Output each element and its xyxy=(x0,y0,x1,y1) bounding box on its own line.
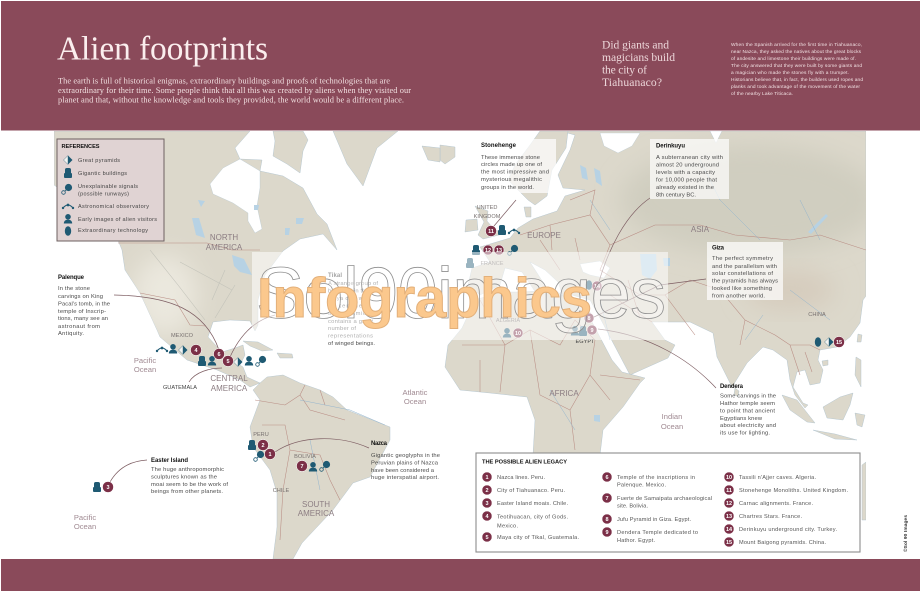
legend: the possible alien legacy: 2 xyxy=(485,488,489,494)
marker 14 xyxy=(592,281,602,291)
callout: Nazca: Peruvian plains of Nazca xyxy=(371,460,439,466)
legend: the possible alien legacy: Chartres Stars. France. xyxy=(739,514,802,520)
callout: Tikal: Maya city, with xyxy=(328,296,370,302)
legend: the possible alien legacy: 1 xyxy=(485,475,489,481)
callout: Easter Island: sculptures known as the xyxy=(151,474,217,480)
legend: the possible alien legacy: 14 xyxy=(726,527,733,533)
map labels: Pacific xyxy=(134,356,156,365)
legend: the possible alien legacy: Mexico. xyxy=(497,524,518,530)
legend: the possible alien legacy: Maya city of Tikal, Guatemala. xyxy=(497,535,579,541)
legend: the possible alien legacy: 15 xyxy=(726,540,732,546)
map labels: Indian xyxy=(662,412,682,421)
map labels: SOUTH xyxy=(302,500,330,509)
marker 10 xyxy=(513,328,523,338)
references box: (possible runways) xyxy=(78,192,129,198)
legend: the possible alien legacy: 8 xyxy=(605,517,609,523)
references box: Gigantic buildings xyxy=(78,171,127,177)
map labels: CHINA xyxy=(808,312,826,318)
marker 11: 11 xyxy=(488,229,494,235)
sidebar text: a magician who made the stones fly with a trumpet. xyxy=(731,70,849,76)
map labels: UNITED xyxy=(477,205,497,211)
references box: REFERENCES xyxy=(62,144,100,150)
callout: Derinkuyu: A subterranean city with xyxy=(656,155,723,161)
map labels xyxy=(74,205,826,531)
sidebar text: The city answered that they were built by some giants and xyxy=(731,63,862,69)
callout: Easter Island: beings from other planets. xyxy=(151,489,223,495)
sidebar text: planks and took advantage of the movement of the water xyxy=(731,84,860,90)
title: Alien footprints xyxy=(57,30,268,68)
map labels: AFRICA xyxy=(549,389,579,398)
world map xyxy=(54,131,880,559)
terrain shading xyxy=(133,145,880,335)
callout: Tikal: Tikal xyxy=(328,273,342,279)
callout: Palenque: tions, many see an xyxy=(58,316,108,322)
legend: the possible alien legacy: 13 xyxy=(726,514,732,520)
sidebar text: When the Spanish arrived for the first time in Tiahuanaco, xyxy=(731,42,862,48)
callout: Giza: solar constellations of xyxy=(712,271,773,277)
header band xyxy=(1,1,920,130)
callout: Nazca: huge interspatial airport. xyxy=(371,475,439,481)
marker 8: 8 xyxy=(587,316,591,322)
marker 6: 6 xyxy=(217,352,221,358)
sidebar heading: Tiahuanaco? xyxy=(602,76,662,89)
legend: the possible alien legacy: 7 xyxy=(605,496,609,502)
callout: Palenque: In the stone xyxy=(58,286,90,292)
marker 13 xyxy=(494,245,504,255)
references box xyxy=(57,139,164,241)
callout: Easter Island: Easter Island xyxy=(151,458,188,464)
callout: Stonehenge xyxy=(481,143,549,191)
legend: the possible alien legacy: 4 xyxy=(485,514,489,520)
markers and symbols on the map xyxy=(93,225,834,492)
map labels: MEXICO xyxy=(171,333,194,339)
legend: the possible alien legacy: Carnac alignments. France. xyxy=(739,501,813,507)
legend: the possible alien legacy: THE POSSIBLE ALIEN LEGACY xyxy=(482,460,567,466)
callout: Tikal: of winged beings. xyxy=(328,341,375,347)
map labels: ASIA xyxy=(691,225,710,234)
copyright credit: ©Sol 90 Images xyxy=(902,515,909,552)
callout: Tikal: and pyramids, xyxy=(328,311,372,317)
map labels: KINGDOM xyxy=(474,214,501,220)
map labels: CENTRAL xyxy=(210,374,248,383)
marker 2 xyxy=(258,440,268,450)
map labels: Pacific xyxy=(74,513,96,522)
sidebar text: of andesite and limestone their buildings were made of. xyxy=(731,56,856,62)
sidebar heading: magicians build xyxy=(602,51,675,64)
legend: the possible alien legacy: 12 xyxy=(726,501,732,507)
intro text: planet and that, without the knowledge and tools they provided, the world would be a different place. xyxy=(58,96,404,104)
callout: Derinkuyu: almost 20 underground xyxy=(656,162,719,168)
legend: the possible alien legacy: Easter Island moais. Chile. xyxy=(497,501,568,507)
legend: the possible alien legacy: Palenque. Mexico. xyxy=(617,482,666,488)
callout: Stonehenge: the most impressive and xyxy=(481,170,549,176)
references box: Unexplainable signals xyxy=(78,184,138,190)
callout: Derinkuyu: 8th century BC. xyxy=(656,192,696,198)
callout: Derinkuyu: Derinkuyu xyxy=(656,144,685,150)
legend: the possible alien legacy: site. Bolivia. xyxy=(617,504,648,510)
legend: the possible alien legacy: 5 xyxy=(485,535,489,541)
legend: the possible alien legacy: Temple of the inscriptions in xyxy=(617,475,695,481)
sidebar heading xyxy=(602,38,675,89)
marker 15 xyxy=(834,336,844,348)
references box: Astronomical observatory xyxy=(78,204,149,210)
callout: Dendera: its use for lighting. xyxy=(720,430,770,436)
map labels: FRANCE xyxy=(480,261,504,267)
map labels: NORTH xyxy=(210,233,238,242)
marker 12: 12 xyxy=(485,248,491,254)
marker 2: 2 xyxy=(261,443,265,449)
map labels: AMERICA xyxy=(298,509,335,518)
legend: the possible alien legacy: Stonehenge Monoliths. United Kingdom. xyxy=(739,488,848,494)
callout: Stonehenge: mysterious megalithic xyxy=(481,177,542,183)
references box: Great pyramids xyxy=(78,158,120,164)
callout: Nazca xyxy=(371,441,440,481)
callout: Dendera: Egyptians knew xyxy=(720,416,763,422)
map labels: Atlantic xyxy=(403,388,428,397)
map labels: GUATEMALA xyxy=(163,385,197,391)
callout: Palenque: astronaut from xyxy=(58,324,100,330)
callout: Giza: looked like something xyxy=(712,286,772,292)
callout: Easter Island xyxy=(151,458,228,495)
legend: the possible alien legacy xyxy=(476,453,860,552)
sidebar text xyxy=(731,42,863,97)
seas and lakes xyxy=(210,131,722,278)
sidebar text: near Nazca, they asked the natives about the great blocks xyxy=(731,49,862,55)
map labels: Ocean xyxy=(134,365,156,374)
legend: the possible alien legacy: 10 xyxy=(726,475,732,481)
watermark: outlined wordmark: Sol90images xyxy=(256,254,666,334)
callout: Giza: Giza xyxy=(712,246,725,252)
legend: the possible alien legacy: Fuerte de Samaipata archaeological xyxy=(617,496,712,502)
legend: the possible alien legacy: Tassili n'Ajjer caves. Algeria. xyxy=(739,475,816,481)
intro text xyxy=(58,76,411,104)
callout: Derinkuyu: levels with a capacity xyxy=(656,170,715,176)
callout: Dendera xyxy=(720,384,776,436)
marker 9 xyxy=(587,325,597,335)
callout: Tikal xyxy=(328,273,378,347)
callout: Stonehenge: Stonehenge xyxy=(481,143,517,149)
marker 1 xyxy=(264,448,276,460)
map labels: Ocean xyxy=(404,397,426,406)
callout leader lines xyxy=(110,198,716,482)
legend: the possible alien legacy: 6 xyxy=(605,475,609,481)
map labels: BOLIVIA xyxy=(294,454,316,460)
legend: the possible alien legacy: 3 xyxy=(485,501,489,507)
callout: Dendera: Dendera xyxy=(720,384,744,390)
marker 8 xyxy=(584,313,594,323)
references box: Early images of alien visitors xyxy=(78,217,157,223)
legend: the possible alien legacy: Mount Baigong pyramids. China. xyxy=(739,540,826,546)
map labels: EGYPT xyxy=(576,339,595,345)
watermark: orange wordmark: Infographics xyxy=(257,266,592,329)
map labels: AMERICA xyxy=(206,243,243,252)
borders and rivers xyxy=(118,160,866,540)
callout: Giza: and the parallelism with xyxy=(712,264,777,270)
marker 5: 5 xyxy=(226,359,230,365)
map labels: Ocean xyxy=(661,422,683,431)
sidebar heading: the city of xyxy=(602,64,647,76)
map labels: CHILE xyxy=(273,488,290,494)
callout: Palenque xyxy=(58,275,110,337)
callout panels xyxy=(478,139,783,300)
intro text: The earth is full of historical enigmas, extraordinary buildings and proofs of technologies that are xyxy=(58,76,390,86)
callout: Stonehenge: These immense stone xyxy=(481,155,540,161)
marker 5 xyxy=(222,356,234,366)
legend: the possible alien legacy: Hathor. Egypt. xyxy=(617,538,655,544)
callout: Stonehenge: groups in the world. xyxy=(481,185,534,191)
callout: Dendera: to point that ancient xyxy=(720,408,775,414)
marker 7 xyxy=(296,460,308,472)
callout: Giza: from another world. xyxy=(712,294,765,300)
legend: the possible alien legacy: 11 xyxy=(726,488,732,494)
intro text: extraordinary for their time. Some people think that all this was created by aliens when they visited our xyxy=(58,86,411,95)
legend: the possible alien legacy: Teotihuacan, city of Gods. xyxy=(497,514,568,520)
callout: Derinkuyu: for 10,000 people that xyxy=(656,178,717,184)
marker 11 xyxy=(486,226,496,236)
legend: the possible alien legacy: City of Tiahuanaco. Peru. xyxy=(497,488,565,494)
sidebar heading: Did giants and xyxy=(602,38,669,52)
callout: Giza: the pyramids has always xyxy=(712,278,778,284)
sidebar text: of the nearby Lake Titicaca. xyxy=(731,91,793,97)
marker 15: 15 xyxy=(836,340,842,346)
marker 10: 10 xyxy=(515,331,521,337)
marker 1: 1 xyxy=(268,452,272,458)
marker 3 xyxy=(102,482,114,492)
callout: Giza xyxy=(712,246,778,300)
legend: the possible alien legacy: Dendera Temple dedicated to xyxy=(617,530,698,536)
callout: Tikal: number of xyxy=(328,326,356,332)
marker 6 xyxy=(214,348,224,360)
callout: Giza: The perfect symmetry xyxy=(712,256,773,262)
callout: Nazca: Gigantic geoglyphs in the xyxy=(371,453,440,459)
marker 14: 14 xyxy=(594,284,601,290)
callout: Tikal: A strange group of xyxy=(328,281,378,287)
callout: Easter Island: moai seem to be the work of xyxy=(151,482,228,488)
legend: the possible alien legacy: Nazca lines. Peru. xyxy=(497,475,545,481)
marker 3: 3 xyxy=(106,485,110,491)
legend: the possible alien legacy: Jufu Pyramid in Giza. Egypt. xyxy=(617,517,691,523)
callout: Dendera: Some carvings in the xyxy=(720,394,776,400)
map labels: Ocean xyxy=(74,522,96,531)
map labels: PERU xyxy=(253,432,269,438)
callout: Palenque: carvings on King xyxy=(58,294,103,300)
legend: the possible alien legacy: Derinkuyu underground city. Turkey. xyxy=(739,527,837,533)
marker 9: 9 xyxy=(590,328,594,334)
marker 13: 13 xyxy=(496,248,502,254)
map labels: ALGERIA xyxy=(496,318,520,324)
callout: Tikal: representations xyxy=(328,334,373,340)
marker 4: 4 xyxy=(194,348,198,354)
marker 12 xyxy=(483,245,493,255)
references box: Extraordinary technology xyxy=(78,228,148,234)
callout: Dendera: about electricity and xyxy=(720,423,776,429)
callout: Palenque: Pacal's tomb, in the xyxy=(58,302,110,308)
callout: Palenque: Antiquity. xyxy=(58,331,84,337)
callout: Palenque: Palenque xyxy=(58,275,85,281)
legend: the possible alien legacy: 9 xyxy=(605,530,609,536)
marker 4 xyxy=(190,344,202,356)
callout: Tikal: contains a great xyxy=(328,319,373,325)
sidebar text: Historians believe that, in fact, the builders used ropes and xyxy=(731,77,863,83)
callout: Nazca: Nazca xyxy=(371,441,388,447)
watermark panel xyxy=(252,252,668,340)
map labels: AMERICA xyxy=(211,384,248,393)
callout: Derinkuyu xyxy=(656,144,723,198)
callout: Palenque: temple of Inscrip- xyxy=(58,309,106,315)
footer band xyxy=(1,559,920,591)
land masses xyxy=(54,131,866,559)
callout: Derinkuyu: already existed in the xyxy=(656,185,714,191)
callout: Dendera: Hathor temple seem xyxy=(720,401,775,407)
marker 7: 7 xyxy=(300,464,304,470)
callout: Easter Island: The huge anthropomorphic xyxy=(151,467,224,473)
callout: Stonehenge: circles made up one of xyxy=(481,162,542,168)
map labels: EUROPE xyxy=(527,231,561,240)
callout: Tikal: buildings in this xyxy=(328,288,370,294)
callout: Tikal: its temples xyxy=(328,304,366,310)
callout: Nazca: have been considered a xyxy=(371,468,435,474)
